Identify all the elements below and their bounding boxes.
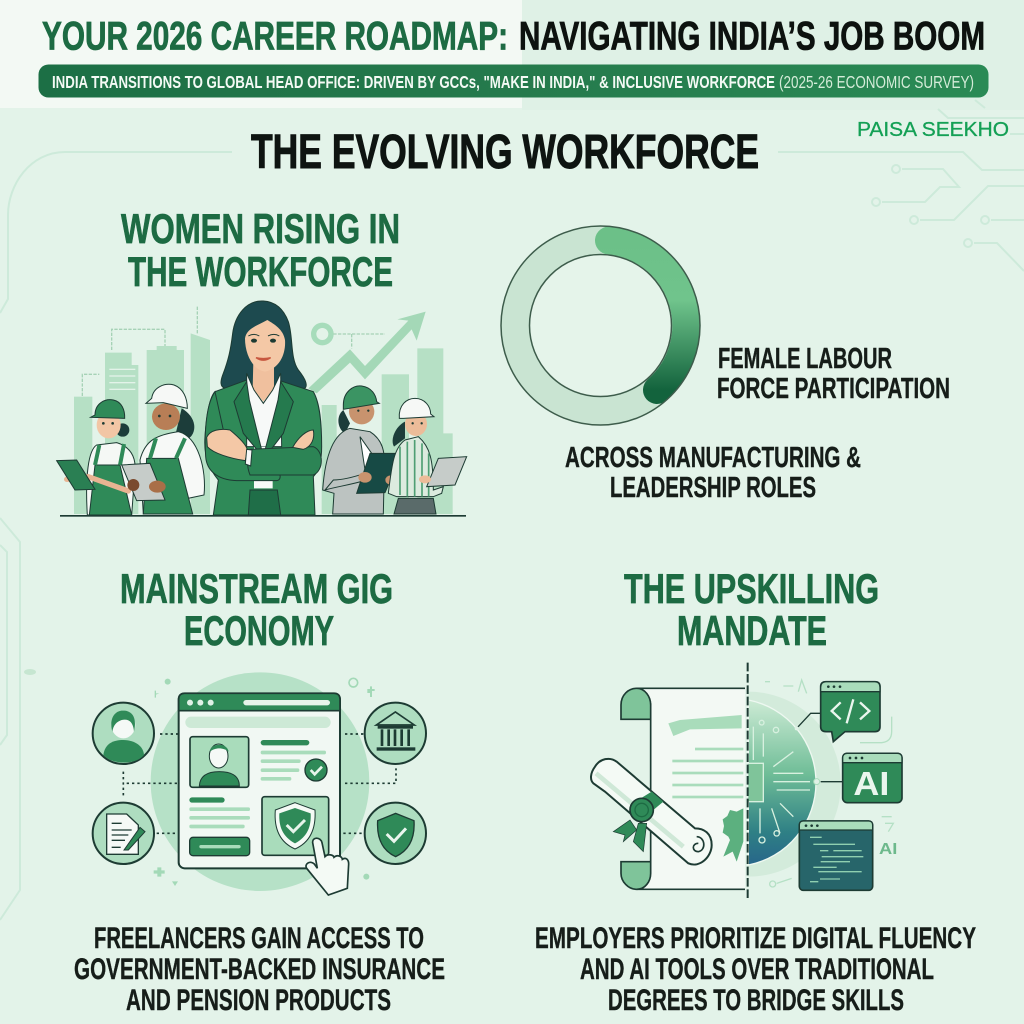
illustration: gig economy platform <box>93 672 426 895</box>
scroll certificate <box>621 688 745 889</box>
circle icon: bank <box>365 703 426 764</box>
caption: gig economy: AND PENSION PRODUCTS <box>126 984 391 1017</box>
AI window: AI <box>853 766 889 803</box>
browser window <box>179 693 340 868</box>
heading: women rising: WOMEN RISING IN <box>121 205 400 252</box>
illustration: upskilling certificate and AI <box>591 663 902 900</box>
circle icon: person <box>93 703 154 764</box>
AI circuit half circle <box>748 692 841 877</box>
hand cursor <box>306 838 349 895</box>
worker 3 <box>323 386 402 514</box>
terminal window <box>799 821 873 890</box>
AI window <box>843 753 902 803</box>
heading: upskilling: THE UPSKILLING <box>624 565 879 612</box>
circle icon: document <box>93 803 154 864</box>
donut caption: LEADERSHIP ROLES <box>610 472 816 504</box>
skyline and growth arrow <box>74 307 453 514</box>
donut label: FEMALE LABOUR <box>718 343 892 375</box>
heading: gig economy: MAINSTREAM GIG <box>120 565 393 612</box>
ground line <box>60 515 466 517</box>
heading: women rising: THE WORKFORCE <box>128 248 393 295</box>
donut caption: ACROSS MANUFACTURING & <box>565 442 861 474</box>
circle icon: shield <box>365 803 426 864</box>
heading: gig economy <box>120 565 393 654</box>
central woman <box>205 301 322 515</box>
worker 1 <box>57 400 135 515</box>
caption: gig economy <box>74 922 445 1017</box>
dotted connectors <box>123 734 396 833</box>
caption: upskilling <box>535 922 976 1017</box>
heading: gig economy: ECONOMY <box>184 607 334 654</box>
donut label <box>717 343 950 405</box>
heading: upskilling: MANDATE <box>677 607 827 654</box>
rolled diploma <box>591 759 712 865</box>
heading: upskilling <box>624 565 879 654</box>
main heading: THE EVOLVING WORKFORCE <box>251 126 759 179</box>
heading: women rising <box>121 205 400 295</box>
code window <box>821 682 880 742</box>
brand label: PAISA SEEKHO <box>857 118 1009 141</box>
donut chart: female labour force participation <box>501 226 700 425</box>
worker 2 <box>122 384 204 514</box>
donut caption <box>565 442 861 504</box>
illustration: upskilling certificate and AI: AI <box>879 841 897 858</box>
title: YOUR 2026 CAREER ROADMAP: <box>42 14 508 58</box>
worker 4 <box>388 398 467 514</box>
title <box>42 14 985 58</box>
caption: gig economy: FREELANCERS GAIN ACCESS TO <box>94 922 424 955</box>
caption: gig economy: GOVERNMENT-BACKED INSURANCE <box>74 953 445 986</box>
subtitle banner: INDIA TRANSITIONS TO GLOBAL HEAD OFFICE: DRIVEN BY GCCs, "MAKE IN INDIA," & INCLUSIVE WORKFORCE <box>52 72 775 92</box>
subtitle banner <box>38 64 988 98</box>
illustration: women in the workforce <box>57 301 467 517</box>
